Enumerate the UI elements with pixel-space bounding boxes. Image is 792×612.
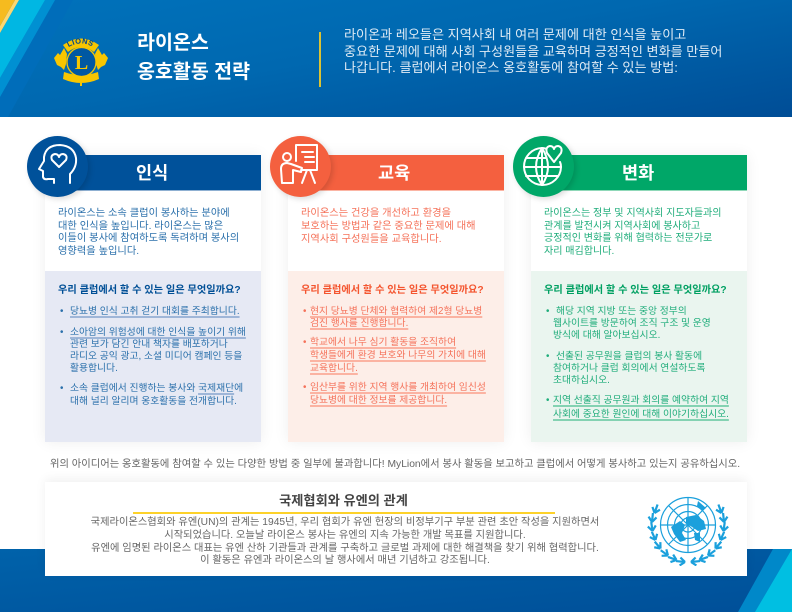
list: education actions: 교육합니다. — [310, 363, 358, 374]
list: awareness actions — [60, 306, 246, 407]
list: change actions: • — [546, 395, 549, 406]
list: education actions: 임산부를 위한 지역 행사를 개최하여 임신성 — [310, 382, 486, 393]
text: UN relationship body — [91, 516, 599, 566]
icon: Lions logo: L — [75, 52, 88, 74]
list: education actions: 학교에서 나무 심기 활동을 조직하여 — [310, 337, 456, 348]
header intro text: 중요한 문제에 대해 사회 구성원들을 교육하며 긍정적인 변화를 만들어 — [344, 44, 722, 58]
icon: Lions logo: LIONS — [66, 38, 94, 47]
list: change actions: 참여하거나 클럽 회의에서 연설하도록 — [553, 363, 705, 374]
text: UN relationship body: 국제라이온스협회와 유엔(UN)의 관계는 1945년, 우리 협회가 유엔 헌장의 비정부기구 부분 관련 초안 작성을 지원하면서 — [91, 517, 599, 528]
text: change description — [544, 207, 722, 257]
footnote text: 위의 아이디어는 옹호활동에 참여할 수 있는 다양한 방법 중 일부에 불과합니다! MyLion에서 봉사 활동을 보고하고 클럽에서 어떻게 봉사하고 있는지 공유하십시오. — [50, 459, 740, 470]
list: education actions: • — [303, 337, 306, 348]
header intro text: 라이온과 레오들은 지역사회 내 여러 문제에 대한 인식을 높이고 — [344, 27, 686, 42]
list: change actions: 사회에 중요한 원인에 대해 이야기하십시오. — [553, 409, 729, 420]
list: education actions: • — [303, 382, 306, 393]
list: change actions: • — [546, 306, 549, 317]
header diagonal stripes — [0, 0, 55, 117]
list: education actions — [303, 306, 486, 407]
list: education actions: • — [303, 306, 306, 317]
text: UN relationship body: 유엔에 임명된 라이온스 대표는 유엔 산하 기관들과 관계를 구축하고 글로벌 과제에 대한 해결책을 찾기 위해 협력합니다. — [91, 543, 599, 554]
list: education actions: 검진 행사를 진행합니다. — [310, 318, 408, 329]
list: change actions: 웹사이트를 방문하여 조직 구조 및 운영 — [553, 318, 711, 329]
panel: UN relationship — [45, 482, 747, 576]
list: change actions: • — [546, 351, 549, 362]
text: change description: 긍정적인 변화를 위해 협력하는 전문가로 — [544, 233, 712, 244]
list: change actions: 선출된 공무원을 클럽의 봉사 활동에 — [556, 351, 702, 362]
text: education description — [301, 207, 476, 245]
icon: teacher at board — [270, 136, 331, 197]
text: education description: 라이온스는 건강을 개선하고 환경을 — [301, 208, 451, 219]
text: UN relationship body: 시작되었습니다. 오늘날 라이온스 봉사는 유엔의 지속 가능한 개발 목표를 지원합니다. — [164, 530, 526, 541]
heading: what can our club do: 우리 클럽에서 할 수 있는 일은 무엇일까요? — [544, 285, 727, 296]
yellow rule — [133, 512, 555, 514]
header intro text — [344, 27, 722, 75]
list: change actions: 지역 선출직 공무원과 회의를 예약하여 지역 — [553, 395, 729, 406]
icon: Lions logo — [54, 38, 108, 86]
text: awareness description: 영향력을 높입니다. — [58, 246, 139, 257]
heading: what can our club do: 우리 클럽에서 할 수 있는 일은 무엇일까요? — [301, 285, 484, 296]
icon: UN emblem — [647, 496, 729, 566]
text: change description: 라이온스는 정부 및 지역사회 지도자들과의 — [544, 208, 722, 219]
footer band — [0, 549, 792, 612]
list: awareness actions: 활용합니다. — [70, 363, 118, 374]
list: awareness actions: • — [60, 327, 63, 338]
heading: change: 변화 — [622, 163, 654, 183]
list: education actions: 현지 당뇨병 단체와 협력하여 제2형 당뇨병 — [310, 306, 482, 317]
list: change actions: 초대하십시오. — [553, 375, 610, 386]
text: change description: 관계를 발전시켜 지역사회에 봉사하고 — [544, 221, 700, 232]
list: awareness actions: 당뇨병 인식 고취 걷기 대회를 주최합니다. — [70, 306, 240, 317]
text: awareness description: 대한 인식을 높입니다. 라이온스는 많은 — [58, 221, 223, 232]
heading: awareness: 인식 — [136, 163, 168, 183]
list: change actions — [546, 306, 729, 421]
title — [137, 32, 250, 83]
header band — [0, 0, 792, 117]
text: change description: 자리 매김합니다. — [544, 246, 614, 257]
list: change actions: 해당 지역 지방 또는 중앙 정부의 — [556, 306, 687, 317]
title: 라이온스 — [137, 32, 209, 54]
icon: head with heart — [27, 136, 88, 197]
text: awareness description: 이들이 봉사에 참여하도록 독려하며 봉사의 — [58, 233, 239, 244]
list: awareness actions: 소아암의 위험성에 대한 인식을 높이기 위해 — [70, 327, 246, 338]
text: education description: 지역사회 구성원들을 교육합니다. — [301, 234, 442, 245]
footer diagonal stripes — [738, 549, 792, 612]
list: change actions: 방식에 대해 알아보십시오. — [553, 330, 660, 341]
list: awareness actions: 소속 클럽에서 진행하는 봉사와 국제재단에 — [70, 383, 243, 394]
list: education actions: 당뇨병에 대한 정보를 제공합니다. — [310, 395, 447, 406]
heading: what can our club do: 우리 클럽에서 할 수 있는 일은 무엇일까요? — [58, 285, 241, 296]
icon: globe with heart — [513, 136, 574, 197]
list: awareness actions: 관련 보가 담긴 안내 책자를 배포하거나 — [70, 339, 228, 350]
list: education actions: 학생들에게 환경 보호와 나무의 가치에 대해 — [310, 350, 486, 361]
text: UN relationship body: 이 활동은 유엔과 라이온스의 날 행사에서 매년 기념하고 강조됩니다. — [200, 555, 490, 566]
heading: education: 교육 — [378, 163, 410, 183]
text: education description: 보호하는 방법과 같은 중요한 문제에 대해 — [301, 221, 476, 232]
list: awareness actions: 라디오 공익 광고, 소셜 미디어 캠페인 등을 — [70, 351, 242, 362]
heading: UN relationship: 국제협회와 유엔의 관계 — [279, 493, 408, 508]
text: awareness description: 라이온스는 소속 클럽이 봉사하는 분야에 — [58, 208, 230, 219]
title: 옹호활동 전략 — [137, 61, 250, 83]
list: awareness actions: • — [60, 306, 63, 317]
divider — [318, 32, 320, 87]
list: awareness actions: • — [60, 383, 63, 394]
list: awareness actions: 대해 널리 알리며 옹호활동을 전개합니다. — [70, 396, 237, 407]
header intro text: 나갑니다. 클럽에서 라이온스 옹호활동에 참여할 수 있는 방법: — [344, 60, 678, 75]
text: awareness description — [58, 207, 239, 257]
